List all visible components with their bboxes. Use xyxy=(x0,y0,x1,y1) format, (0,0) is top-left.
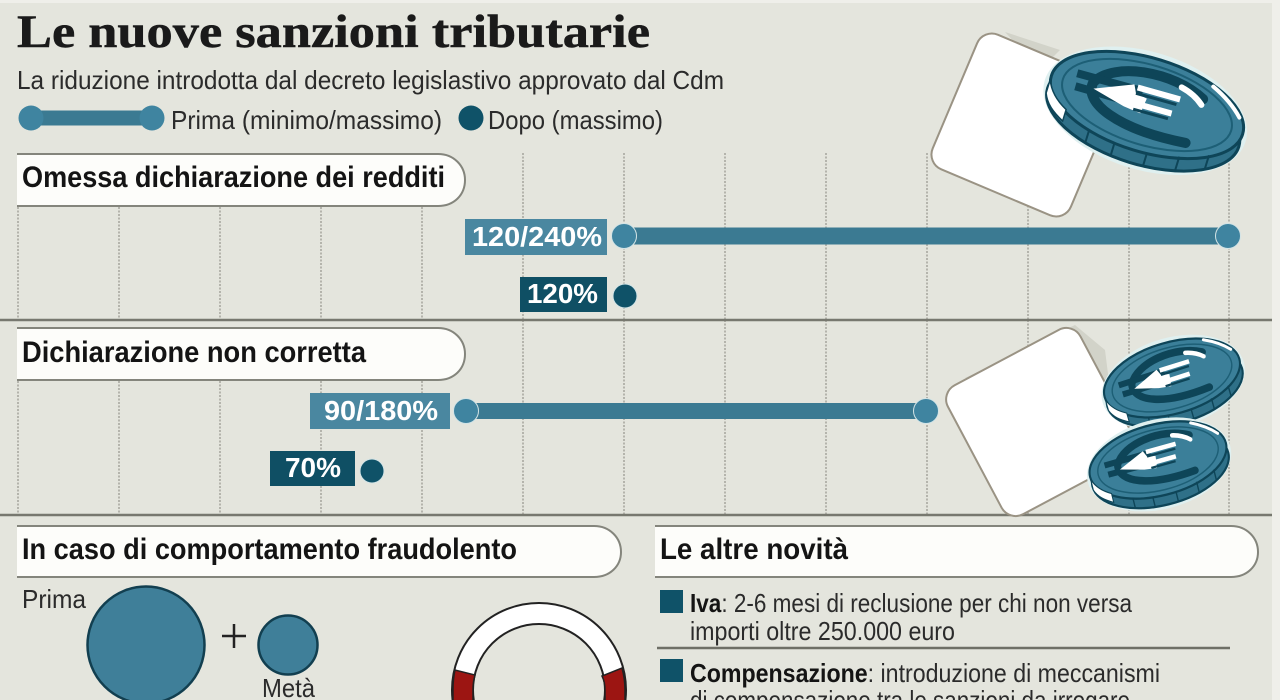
icon: paper and coin top xyxy=(927,24,1263,221)
ring gauge xyxy=(453,614,625,700)
range bar 120/240% xyxy=(465,219,1240,255)
icon: plus xyxy=(222,624,246,648)
after value 70% xyxy=(270,451,384,486)
item: Iva: Iva: 2-6 mesi di reclusione per chi non versa xyxy=(690,588,1132,618)
after value 120%: 120% xyxy=(527,278,598,309)
range bar 90/180%: 90/180% xyxy=(324,395,438,426)
heading pill: Omessa dichiarazione dei redditi xyxy=(22,161,445,194)
circle: prima xyxy=(88,586,204,700)
legend xyxy=(18,105,663,135)
panel: omessa dichiarazione xyxy=(17,154,1240,312)
panel: dichiarazione non corretta xyxy=(17,328,938,486)
circle: metà xyxy=(258,616,318,674)
panel: comportamento fraudolento xyxy=(17,526,625,700)
range bar 120/240%: 120/240% xyxy=(472,221,602,252)
heading pill: In caso di comportamento fraudolento xyxy=(22,533,517,566)
heading pill xyxy=(17,154,465,206)
range bar 90/180% xyxy=(310,393,938,429)
label: prima: Prima xyxy=(22,584,86,614)
item: Iva: importi oltre 250.000 euro xyxy=(690,616,955,646)
legend: after dot: Dopo (massimo) xyxy=(488,105,663,135)
item: Compensazione xyxy=(660,658,1160,700)
heading pill xyxy=(17,526,621,577)
after value 70%: 70% xyxy=(285,452,341,483)
title: Le nuove sanzioni tributarie xyxy=(17,6,650,58)
heading pill: Le altre novità xyxy=(660,533,848,566)
legend: before range xyxy=(18,105,442,135)
heading pill xyxy=(17,328,465,380)
icon: paper and two coins xyxy=(941,319,1256,526)
grid lines: lower row xyxy=(18,320,1229,515)
legend: before range: Prima (minimo/massimo) xyxy=(171,105,442,135)
grid lines: upper row xyxy=(18,153,1229,320)
item: Iva xyxy=(660,588,1132,646)
heading pill: Dichiarazione non corretta xyxy=(22,336,366,369)
heading pill xyxy=(655,526,1258,577)
item: Compensazione: Compensazione: introduzione di meccanismi xyxy=(690,658,1160,688)
panel: le altre novità xyxy=(655,526,1258,700)
subtitle: La riduzione introdotta dal decreto legislastivo approvato dal Cdm xyxy=(17,65,724,95)
after value 120% xyxy=(520,277,637,312)
